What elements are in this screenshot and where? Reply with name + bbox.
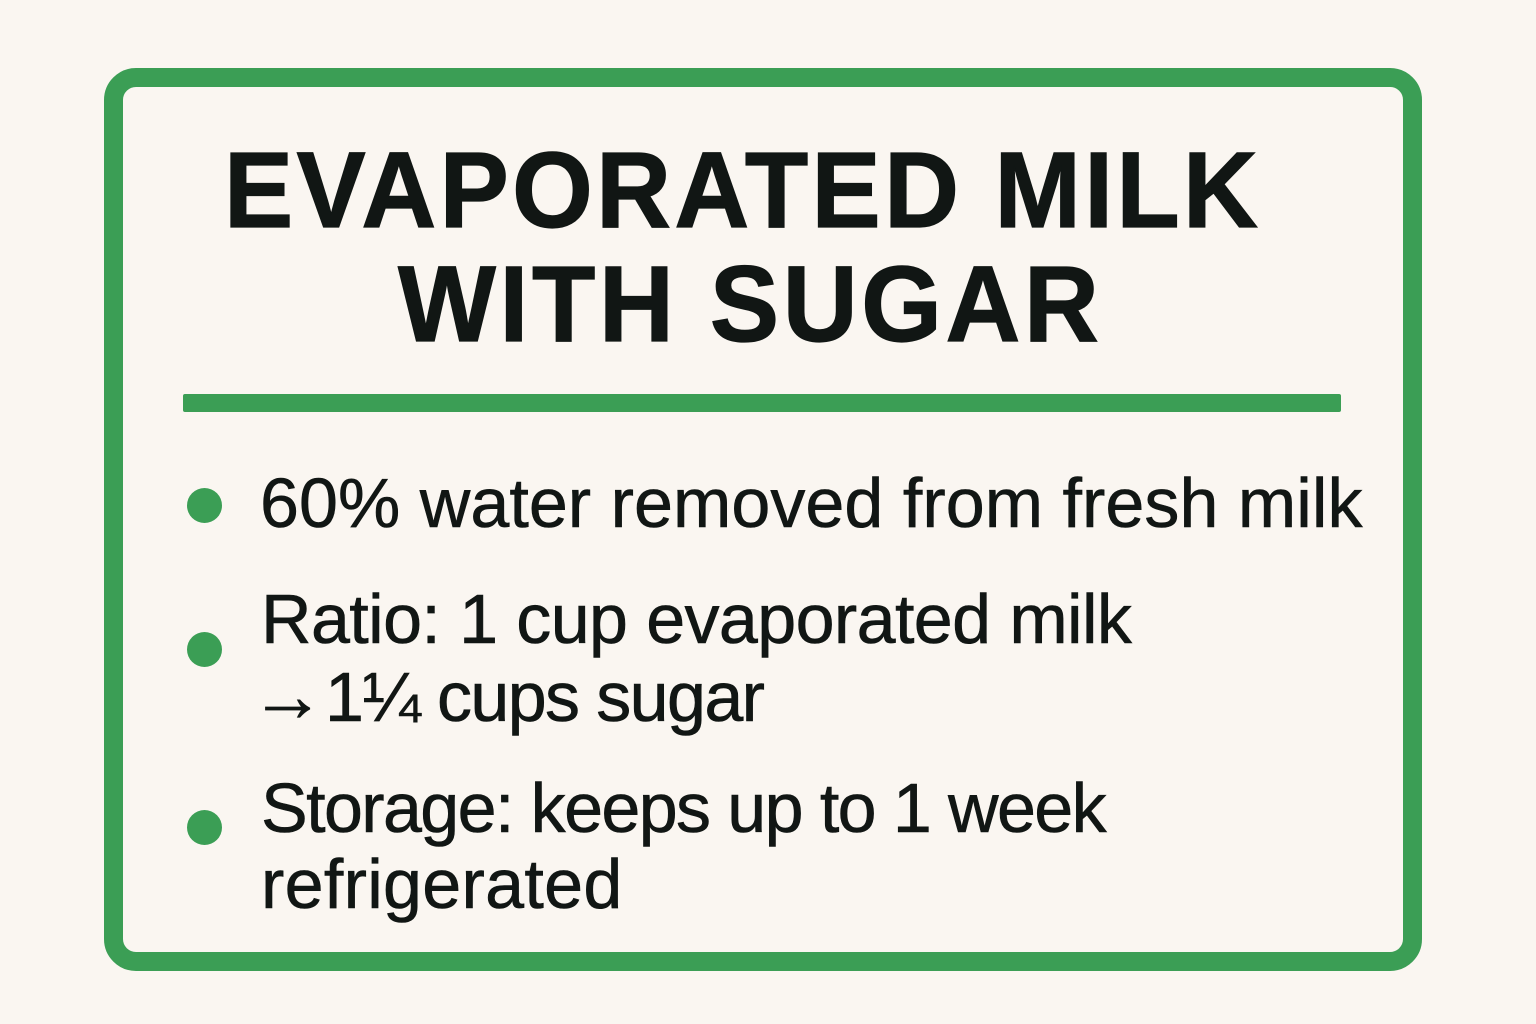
- text: storage: Storage: keeps up to 1 week: [261, 769, 1105, 847]
- title line 1: EVAPORATED MILK: [224, 129, 1261, 250]
- text: ratio: [250, 580, 1132, 737]
- panel: label card: [104, 68, 1422, 971]
- bullet icon 1: [187, 488, 222, 523]
- text: storage: [261, 769, 1108, 923]
- divider: [183, 394, 1341, 412]
- bullet icon 2: [187, 632, 222, 667]
- text: ratio: →: [250, 653, 325, 737]
- text: water removed: 60% water removed from fresh milk: [260, 464, 1363, 542]
- bullet icon 3: [187, 810, 222, 845]
- text: ratio: 1¼ cups sugar: [325, 658, 763, 736]
- text: storage: refrigerated: [261, 845, 623, 923]
- title line 2: WITH SUGAR: [398, 243, 1103, 364]
- text: ratio: Ratio: 1 cup evaporated milk: [261, 580, 1131, 658]
